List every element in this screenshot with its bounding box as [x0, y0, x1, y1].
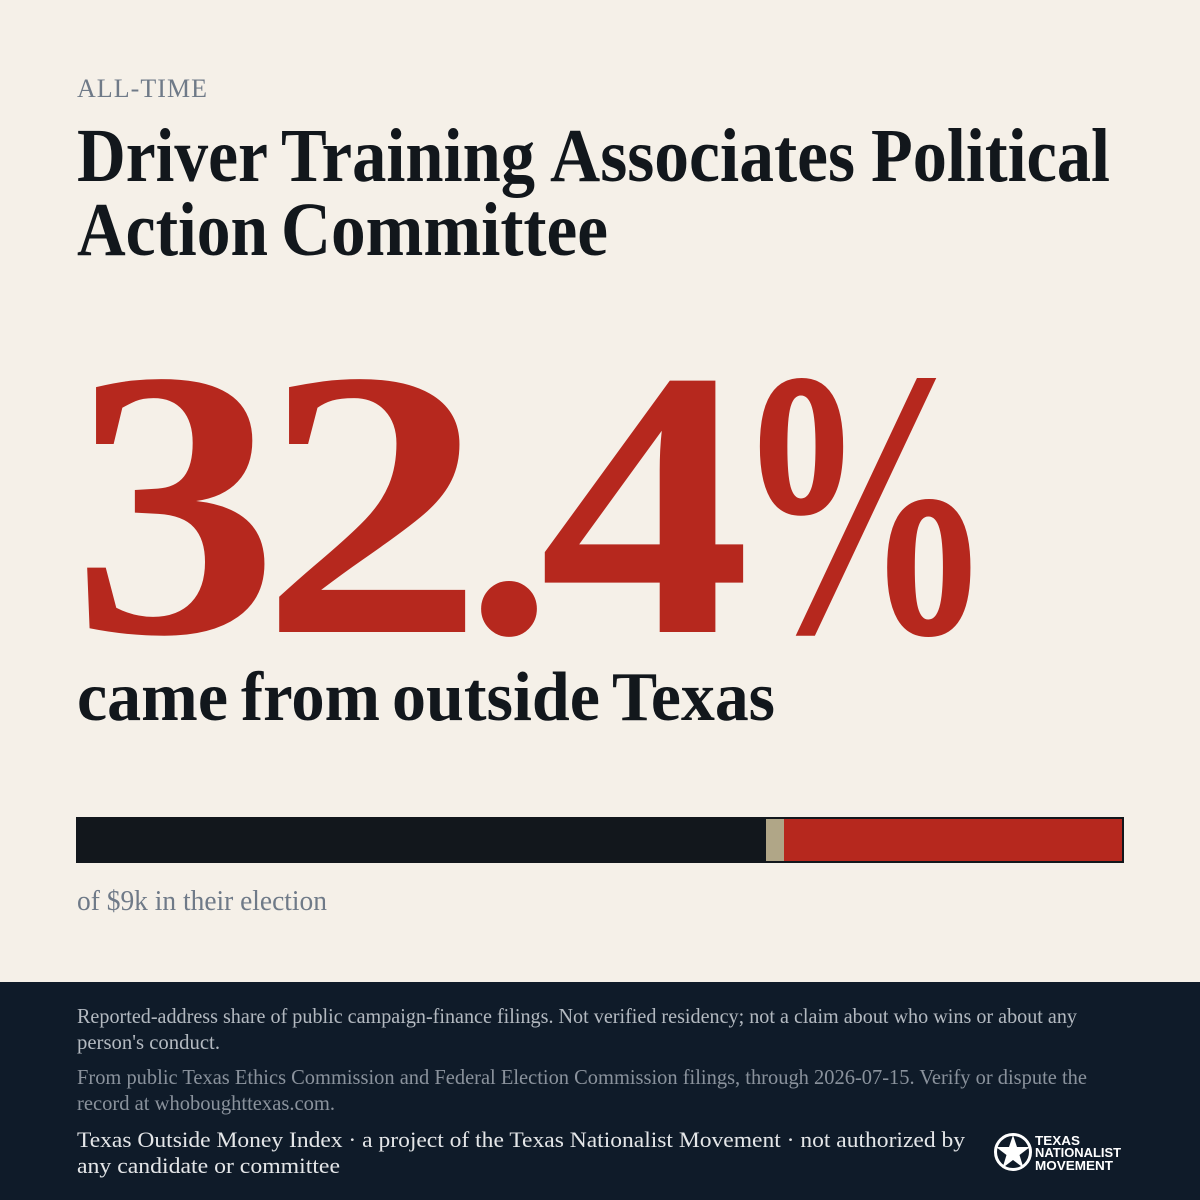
title: Driver: [77, 114, 268, 198]
bar segment: outside Texas: [784, 819, 1122, 861]
source note: [77, 1065, 1087, 1115]
title: Associates: [550, 114, 855, 198]
subheading: Texas: [612, 659, 775, 736]
big percentage: 2: [260, 292, 484, 715]
logo: Texas Nationalist Movement: TEXAS: [1035, 1133, 1080, 1148]
subheading: from: [241, 659, 380, 736]
stacked bar: [76, 817, 1124, 863]
disclaimer: [77, 1004, 1077, 1054]
title: Action: [77, 188, 268, 272]
big percentage: %: [733, 292, 995, 715]
logo: Texas Nationalist Movement: MOVEMENT: [1035, 1158, 1113, 1173]
logo: Texas Nationalist Movement: [996, 1133, 1121, 1173]
attribution: Texas Outside Money Index · a project of the Texas Nationalist Movement · not authorized by: [77, 1127, 965, 1152]
title: Political: [871, 114, 1110, 198]
disclaimer: person's conduct.: [77, 1030, 220, 1054]
footer: [0, 982, 1200, 1200]
bar segment: unknown: [766, 819, 784, 861]
title: Committee: [281, 188, 608, 272]
logo: Texas Nationalist Movement: NATIONALIST: [1035, 1145, 1121, 1160]
subheading: outside: [392, 659, 600, 736]
bar caption: of $9k in their election: [77, 886, 327, 917]
source note: From public Texas Ethics Commission and Federal Election Commission filings, through 2026-07-15. Verify or dispute the: [77, 1065, 1087, 1089]
big percentage: 3: [72, 292, 279, 715]
eyebrow label: ALL-TIME: [77, 74, 207, 103]
big percentage: 4: [539, 292, 751, 715]
subheading: [77, 659, 775, 736]
disclaimer: Reported-address share of public campaign-finance filings. Not verified residency; not a claim about who wins or about any: [77, 1004, 1077, 1028]
big percentage: .: [466, 325, 552, 707]
big percentage: [72, 292, 995, 715]
subheading: came: [77, 659, 228, 736]
title: Training: [281, 114, 535, 198]
source note: record at whoboughttexas.com.: [77, 1091, 335, 1115]
attribution: [77, 1127, 965, 1178]
attribution: any candidate or committee: [77, 1153, 340, 1178]
title: [77, 114, 1110, 272]
